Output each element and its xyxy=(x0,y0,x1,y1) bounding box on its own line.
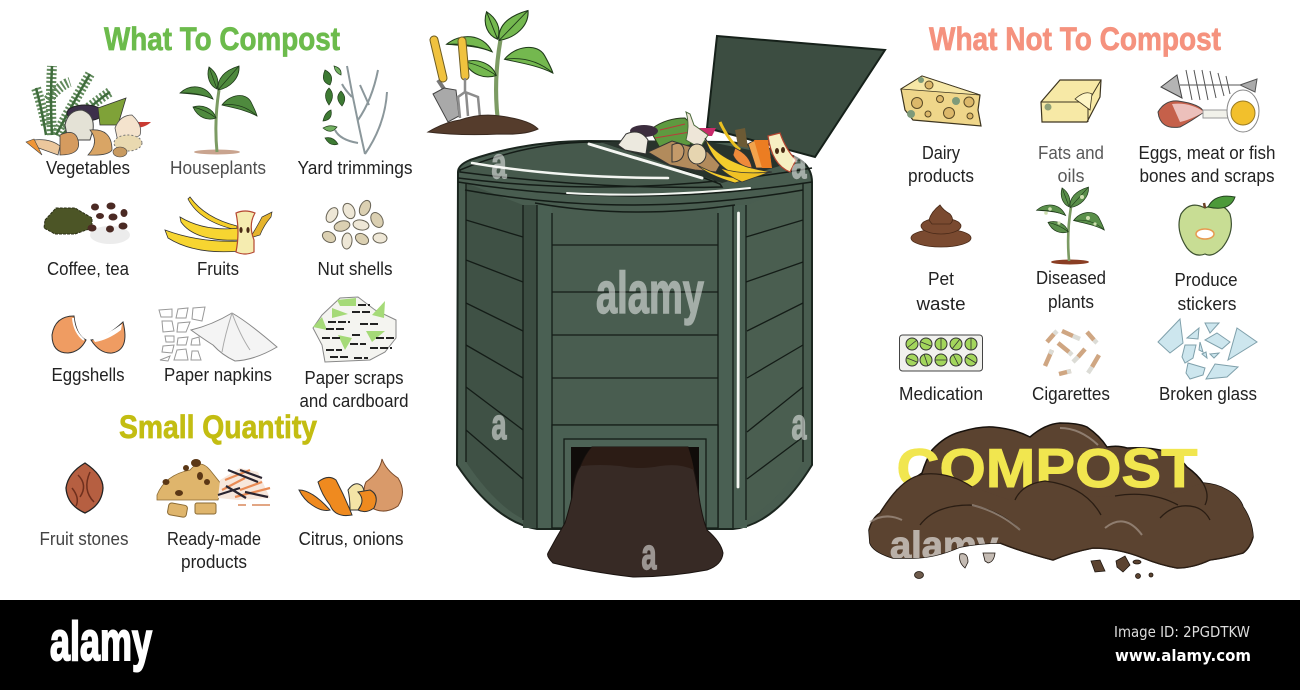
food scraps in bin xyxy=(618,112,796,183)
door opening xyxy=(571,447,699,529)
heading: small quantity: Small Quantity xyxy=(119,409,317,445)
plant xyxy=(447,10,553,118)
label: eggs, meat or fish bones and scraps: bones and scraps xyxy=(1140,165,1274,186)
footer logo: alamy xyxy=(50,610,152,672)
label: fruit stones: Fruit stones xyxy=(40,528,128,549)
label: houseplants: Houseplants xyxy=(170,157,266,178)
corner strips xyxy=(523,205,747,528)
label: ready-made products: Ready-made xyxy=(167,528,261,549)
label: pet waste: Pet xyxy=(928,268,954,289)
illustration: compost pile xyxy=(869,423,1253,578)
watermark marks: a xyxy=(492,139,507,188)
icon: broken glass xyxy=(1158,319,1257,379)
label: vegetables: Vegetables xyxy=(46,157,130,178)
label: paper scraps and cardboard: Paper scraps xyxy=(304,367,404,388)
pile back xyxy=(869,423,1253,568)
watermark on pile: alamy xyxy=(890,525,998,567)
soil mound xyxy=(428,115,538,135)
watermark marks: a xyxy=(792,139,807,188)
icon: apple with sticker xyxy=(1179,196,1235,255)
panel: small quantity xyxy=(40,409,404,572)
label: eggs, meat or fish bones and scraps: Eggs, meat or fish xyxy=(1138,142,1276,163)
compost heading: COMPOST xyxy=(896,437,1198,499)
pile contour lines xyxy=(869,474,1253,568)
left panel xyxy=(466,183,523,519)
label: produce stickers: stickers xyxy=(1178,293,1236,314)
label: ready-made products xyxy=(167,528,261,572)
watermark marks: a xyxy=(642,530,657,579)
label: dairy products: products xyxy=(908,165,974,186)
website: www.alamy.com xyxy=(1115,646,1251,665)
panel: what to compost xyxy=(26,21,412,411)
compost crumbs xyxy=(914,553,1153,578)
label: eggshells: Eggshells xyxy=(52,364,124,385)
door frame xyxy=(552,425,718,528)
label: cigarettes: Cigarettes xyxy=(1032,383,1110,404)
label: diseased plants: Diseased xyxy=(1036,267,1106,288)
label: coffee, tea: Coffee, tea xyxy=(47,258,130,279)
fork xyxy=(458,41,480,118)
icon: fruit stone xyxy=(66,463,103,513)
icon: butter xyxy=(1041,80,1101,122)
label: paper scraps and cardboard xyxy=(300,367,408,411)
open lid xyxy=(707,36,885,157)
right panel xyxy=(747,183,803,519)
spade xyxy=(433,40,459,122)
watermark marks: a xyxy=(792,400,807,449)
icon: cheese xyxy=(901,76,981,126)
label: produce stickers xyxy=(1174,269,1238,314)
image id: Image ID: 2PGDTKW xyxy=(1114,623,1250,641)
icon: diseased plant xyxy=(1037,187,1104,264)
rim bands xyxy=(458,168,812,212)
label: paper napkins: Paper napkins xyxy=(164,364,272,385)
label: fats and oils: Fats and xyxy=(1038,142,1104,163)
icon: ready-made products xyxy=(157,459,270,518)
door xyxy=(564,439,706,529)
label: diseased plants: plants xyxy=(1048,291,1094,312)
label: paper scraps and cardboard: and cardboard xyxy=(300,390,408,411)
compost spill xyxy=(548,447,723,577)
label: diseased plants xyxy=(1036,267,1106,312)
illustration: plant with garden tools xyxy=(428,10,553,135)
compost shade xyxy=(581,447,694,470)
bin body xyxy=(457,141,812,529)
label: nut shells: Nut shells xyxy=(318,258,392,279)
watermark marks: a xyxy=(492,400,507,449)
label: fruits: Fruits xyxy=(197,258,239,279)
icon: eggshells xyxy=(52,316,125,353)
watermark marks xyxy=(492,139,807,579)
icon: yard trimmings xyxy=(323,66,387,154)
heading: what not to compost: What Not To Compost xyxy=(929,21,1221,57)
opening xyxy=(600,140,800,183)
label: citrus, onions: Citrus, onions xyxy=(298,528,404,549)
label: medication: Medication xyxy=(899,383,983,404)
pile highlights xyxy=(870,428,1142,535)
icon: fruits xyxy=(165,197,272,254)
panel: what not to compost xyxy=(899,21,1276,404)
icon: nut shells xyxy=(320,199,387,249)
icon: pet waste xyxy=(911,205,971,247)
pile front xyxy=(869,474,1253,568)
label: fats and oils: oils xyxy=(1058,165,1084,186)
label: ready-made products: products xyxy=(181,551,247,572)
label: broken glass: Broken glass xyxy=(1159,383,1257,404)
icon: citrus and onion xyxy=(299,459,402,516)
icon: cigarettes xyxy=(1045,331,1099,374)
label: dairy products: Dairy xyxy=(922,142,961,163)
lid top xyxy=(460,142,722,187)
label: yard trimmings: Yard trimmings xyxy=(298,157,412,178)
heading: what to compost: What To Compost xyxy=(104,21,340,57)
icon: fish bones, meat and egg xyxy=(1158,70,1259,132)
lid highlights xyxy=(472,144,750,487)
label: fats and oils xyxy=(1038,142,1104,186)
footer bar xyxy=(0,600,1300,690)
icon: paper napkins xyxy=(159,307,277,361)
icon: paper scraps xyxy=(313,297,396,362)
icon: houseplant xyxy=(180,66,257,154)
illustration: compost bin xyxy=(457,36,885,577)
label: produce stickers: Produce xyxy=(1174,269,1238,290)
icon: medication blister xyxy=(900,335,982,371)
icon: coffee and tea xyxy=(44,202,130,244)
label: eggs, meat or fish bones and scraps xyxy=(1138,142,1276,186)
watermark: alamy centre: alamy xyxy=(596,261,704,326)
label: pet waste: waste xyxy=(915,293,966,314)
icon: vegetables xyxy=(26,66,151,157)
label: pet waste xyxy=(915,268,966,314)
label: dairy products xyxy=(908,142,974,186)
